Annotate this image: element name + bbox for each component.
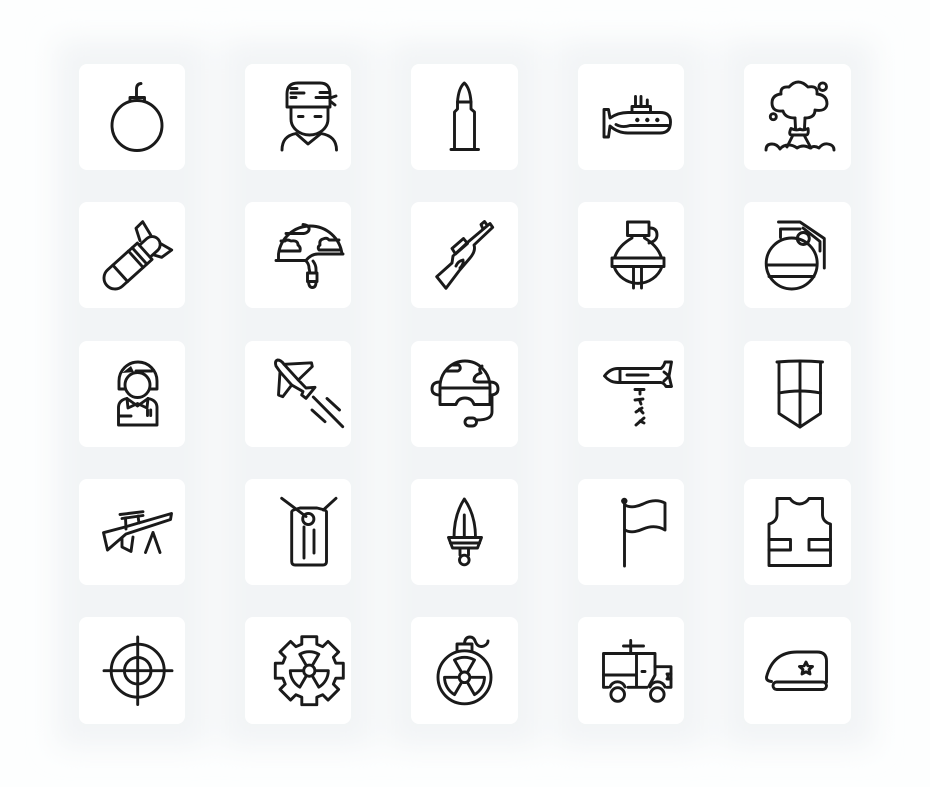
icon: aerial bomb <box>99 222 172 294</box>
icon: rifle <box>437 222 493 288</box>
panel: rifle <box>411 202 518 308</box>
icon: tactical vest <box>769 498 830 566</box>
icon: nuclear bomb <box>438 637 491 704</box>
icon: helmet with goggles and headset <box>432 361 498 426</box>
icon: flag <box>624 501 665 566</box>
icon: bomb <box>112 84 162 150</box>
panel: military truck <box>578 617 684 724</box>
icon: shield <box>777 361 822 427</box>
panel: sniper rifle <box>79 479 185 585</box>
panel: shield <box>744 341 851 447</box>
panel: bomb <box>79 64 185 170</box>
panel: mushroom cloud <box>744 64 851 170</box>
icon: cruise missile with bombs <box>604 362 672 425</box>
panel: bullet <box>411 64 518 170</box>
panel: beret <box>744 617 851 724</box>
icon: helmet mark <box>122 366 134 373</box>
panel: cruise missile with bombs <box>578 341 684 447</box>
panel: crosshair target <box>79 617 185 724</box>
icon: military truck <box>604 640 671 701</box>
icon: nuclear gear <box>275 637 343 705</box>
panel: canteen <box>578 202 684 308</box>
icon: canteen <box>612 222 664 288</box>
panel: dog tag <box>245 479 351 585</box>
icon: bullet <box>451 83 478 150</box>
icon: submarine <box>604 96 670 137</box>
icon: sniper rifle <box>104 512 172 552</box>
icon: mushroom cloud <box>766 82 834 150</box>
icon: jet plane <box>276 360 343 427</box>
panel: aerial bomb <box>79 202 185 308</box>
icon: hand grenade <box>766 222 824 289</box>
panel: camouflage helmet <box>245 202 351 308</box>
icon: soldier with bandana <box>282 83 336 150</box>
icon: flagpole finial <box>621 498 628 504</box>
icon: beret <box>766 652 826 690</box>
panel: dagger <box>411 479 518 585</box>
icon: submarine windows <box>635 118 660 122</box>
panel: tactical vest <box>744 479 851 585</box>
panel: soldier with helmet <box>79 341 185 447</box>
panel: helmet with goggles and headset <box>411 341 518 447</box>
icon: camouflage helmet <box>276 224 343 288</box>
panel: submarine <box>578 64 684 170</box>
icon: soldier with helmet <box>118 362 157 425</box>
icon: dagger <box>448 499 482 565</box>
panel: nuclear gear <box>245 617 351 724</box>
panel: nuclear bomb <box>411 617 518 724</box>
panel: hand grenade <box>744 202 851 308</box>
icon: crosshair target <box>104 637 172 704</box>
panel: jet plane <box>245 341 351 447</box>
panel: flag <box>578 479 684 585</box>
icon: dog tag <box>282 498 336 565</box>
panel: soldier with bandana <box>245 64 351 170</box>
